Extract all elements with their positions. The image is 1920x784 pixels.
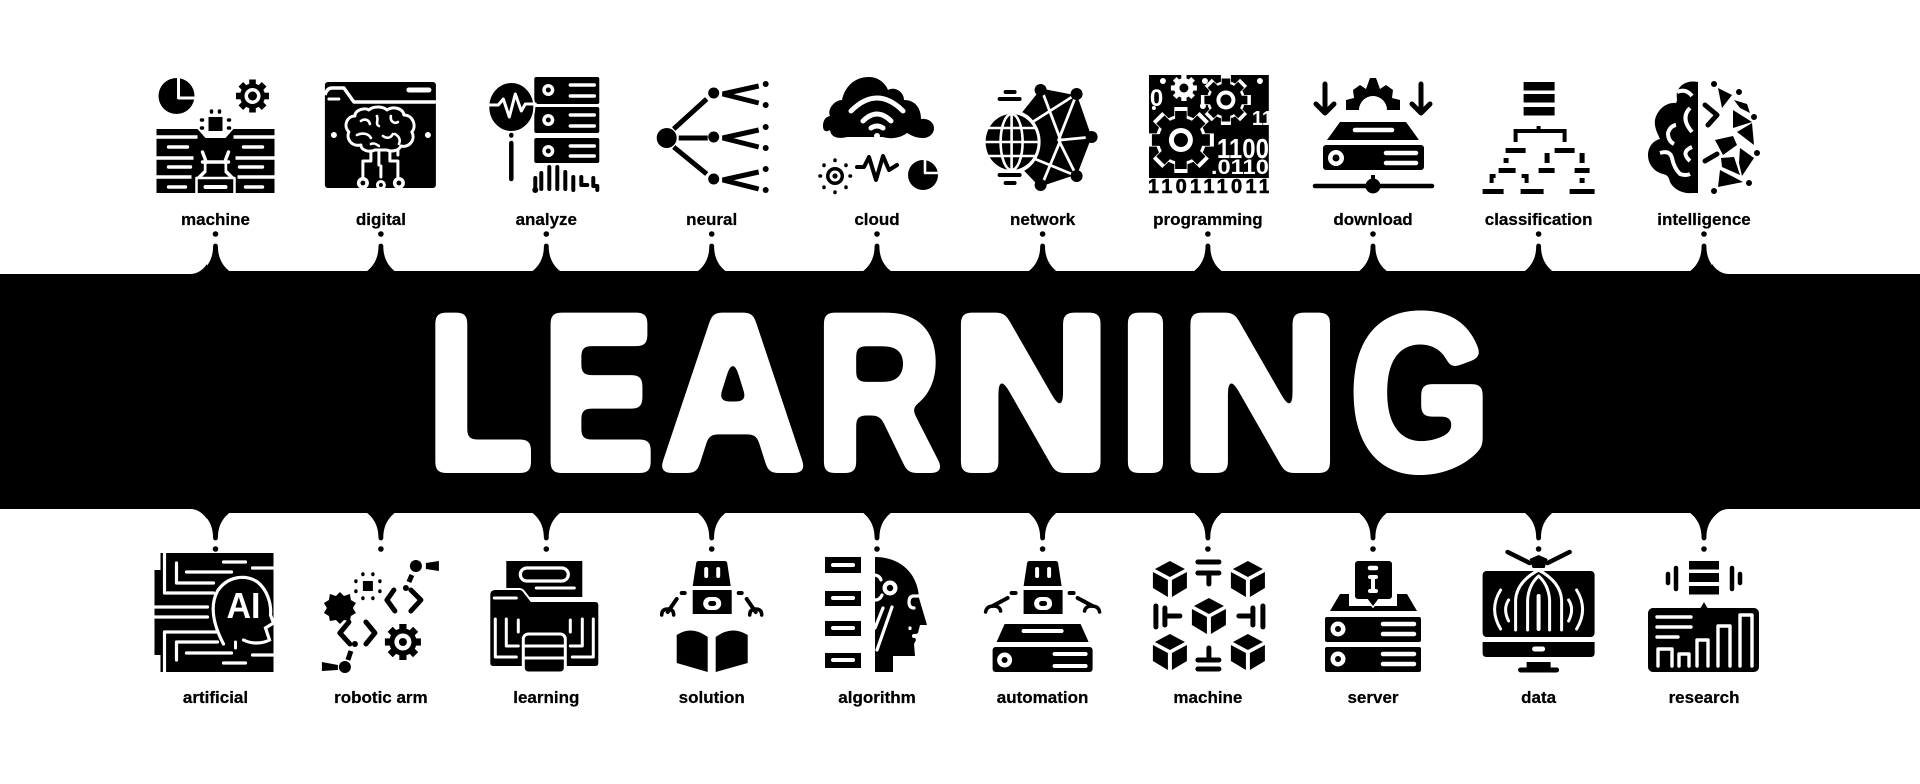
icon: half brain half mesh [1648, 81, 1760, 194]
icon: robot on circuit with pie and gear [156, 78, 274, 193]
connector [1689, 512, 1719, 552]
column: cloud [820, 77, 938, 272]
label: robotic arm [334, 688, 428, 707]
black title band [0, 264, 1920, 519]
label: classification [1485, 210, 1592, 229]
column: network [983, 84, 1098, 272]
title: N [951, 270, 1111, 516]
label: data [1521, 688, 1557, 707]
connector [531, 512, 561, 552]
connector [1358, 512, 1388, 552]
label: research [1669, 688, 1739, 707]
column: download [1315, 78, 1432, 272]
connector [697, 231, 727, 272]
column: solution [662, 512, 762, 707]
icon: robotic arm joints with code and gears [322, 560, 439, 673]
column: digital [325, 82, 436, 272]
icon: AI head on circuit board: AI [226, 585, 260, 626]
icon: gears and binary: 11 [1252, 108, 1273, 130]
column: research [1648, 512, 1759, 707]
icon: robot on server [986, 561, 1100, 672]
column: robotic arm [322, 512, 439, 707]
title: A [660, 270, 806, 516]
label: learning [513, 688, 579, 707]
icon: blockchain cubes [1153, 561, 1265, 670]
connector [200, 231, 230, 272]
connector [862, 231, 892, 272]
label: cloud [854, 210, 900, 229]
connector [1193, 512, 1223, 552]
title: E [543, 270, 654, 516]
icon: wifi cloud with gear, pulse, pie [820, 77, 938, 192]
icon: brain in browser window [325, 82, 436, 190]
title: R [816, 270, 942, 516]
icon: gears and binary: 0 [1150, 85, 1163, 112]
column: programming [1148, 75, 1273, 272]
label: network [1010, 210, 1076, 229]
label: analyze [516, 210, 577, 229]
label: artificial [183, 688, 248, 707]
column: intelligence [1648, 81, 1760, 272]
icon: decision tree [1483, 82, 1595, 194]
label: programming [1153, 210, 1263, 229]
icon: gears and binary: 1100 [1217, 133, 1269, 164]
icon: gears and binary: 110111011 [1148, 176, 1270, 198]
connector [1358, 231, 1388, 272]
label: intelligence [1657, 210, 1751, 229]
column: data [1483, 512, 1595, 707]
column: artificial [154, 512, 274, 707]
label: machine [181, 210, 250, 229]
column: algorithm [825, 512, 927, 707]
icon: globe and mesh [983, 84, 1098, 191]
icon: robot reading book [662, 561, 762, 672]
column: server [1325, 512, 1421, 707]
icon: server rack with magnifier [488, 77, 599, 193]
label: digital [356, 210, 406, 229]
icon: server with info box [1325, 561, 1421, 672]
connector [862, 512, 892, 552]
label: machine [1173, 688, 1242, 707]
connector [1028, 512, 1058, 552]
icon: neural tree [657, 81, 769, 193]
connector [366, 512, 396, 552]
connector [1524, 512, 1554, 552]
connector [1028, 231, 1058, 272]
icon: gears and binary: .0110 [1211, 156, 1269, 179]
icon: folder with document and database [489, 561, 599, 673]
column: neural [657, 81, 769, 272]
icon: download to server [1315, 78, 1432, 194]
column: automation [986, 512, 1100, 707]
label: download [1333, 210, 1413, 229]
icon: bug on monitor [1483, 552, 1595, 670]
icon: AI head with data blocks [825, 557, 927, 672]
icon: analytics panel [1648, 561, 1759, 672]
column: analyze [488, 77, 599, 272]
column: learning [489, 512, 599, 707]
column: machine top [156, 78, 274, 272]
connector [1524, 231, 1554, 272]
title: I [1119, 270, 1172, 516]
connector [531, 231, 561, 272]
column: classification [1483, 82, 1595, 272]
title: L [427, 270, 533, 516]
title: G [1350, 270, 1490, 516]
label: neural [686, 210, 737, 229]
connector [200, 512, 230, 552]
column: machine bottom [1153, 512, 1265, 707]
connector [1689, 231, 1719, 272]
connector [697, 512, 727, 552]
label: server [1347, 688, 1399, 707]
icon: gears and binary [1148, 75, 1273, 198]
connector [1193, 231, 1223, 272]
label: solution [679, 688, 745, 707]
connector [366, 231, 396, 272]
title: N [1180, 270, 1340, 516]
label: automation [997, 688, 1088, 707]
icon: AI head on circuit board [154, 553, 274, 672]
label: algorithm [838, 688, 916, 707]
